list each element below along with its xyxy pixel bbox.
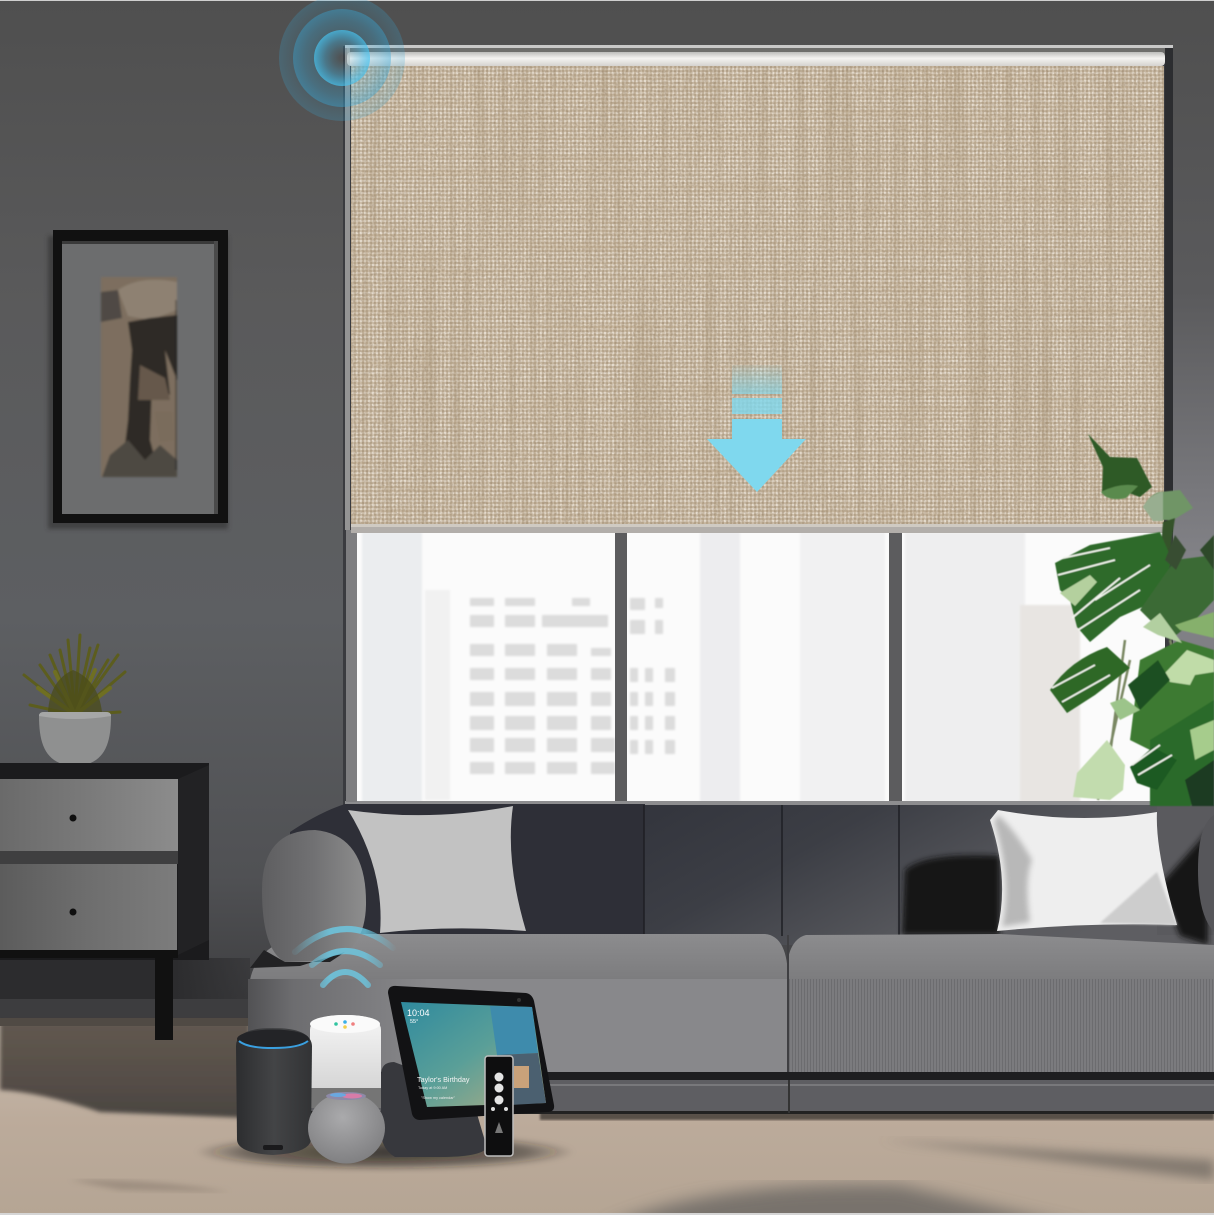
- window frame and city view: [343, 46, 1173, 806]
- dark pillow shadows: [902, 855, 1000, 935]
- dresser wall shadow: [0, 958, 250, 1000]
- lower leaves: [1130, 747, 1177, 790]
- dark upper leaf on blind: [1088, 434, 1152, 497]
- sofa: [248, 804, 1214, 1120]
- roller blind fabric: [351, 66, 1165, 533]
- smart display: Taylor's Birthday: [417, 1075, 470, 1084]
- big monstera leaf: [1055, 532, 1172, 642]
- smart display: Today at 9:00 AM: [418, 1086, 447, 1090]
- baseboard: [0, 999, 250, 1023]
- dresser: [0, 763, 209, 1040]
- wifi signal arcs: [295, 929, 393, 985]
- sofa shadow: [540, 1112, 1214, 1120]
- monstera plant: [1050, 434, 1214, 806]
- middle monstera leaf: [1050, 647, 1130, 713]
- artwork: [101, 277, 177, 477]
- smart display: 55°: [410, 1019, 418, 1025]
- smart display: "Show my calendar": [421, 1096, 456, 1100]
- bottom hem bar: [351, 524, 1165, 527]
- framed picture: [48, 230, 228, 529]
- window mullions: [615, 532, 627, 802]
- floor: [0, 1018, 1214, 1215]
- down arrow: [707, 365, 806, 492]
- remote control: [485, 1056, 513, 1156]
- pillow left: [348, 806, 526, 933]
- pale leaf at frame edge: [1143, 490, 1193, 520]
- stems: [1098, 640, 1212, 800]
- pillow right: [990, 810, 1177, 931]
- city buildings: [362, 532, 1080, 802]
- base: [248, 1072, 1214, 1080]
- front panels: [248, 979, 788, 1073]
- smart display: [381, 986, 554, 1157]
- tall cylinder speaker: [236, 1028, 312, 1155]
- potted plant: [24, 635, 125, 766]
- round mini speaker: [308, 1092, 385, 1164]
- left arm cushion: [262, 830, 366, 962]
- back cushions: [290, 804, 645, 945]
- seat cushions: [250, 934, 788, 980]
- wireless signal icon: [279, 0, 405, 121]
- headrail: [345, 45, 1173, 532]
- white smart speaker: [310, 1015, 381, 1108]
- smart display: 10:04: [407, 1008, 430, 1018]
- right leaf cluster: [1140, 555, 1214, 640]
- smart devices group: [195, 986, 575, 1170]
